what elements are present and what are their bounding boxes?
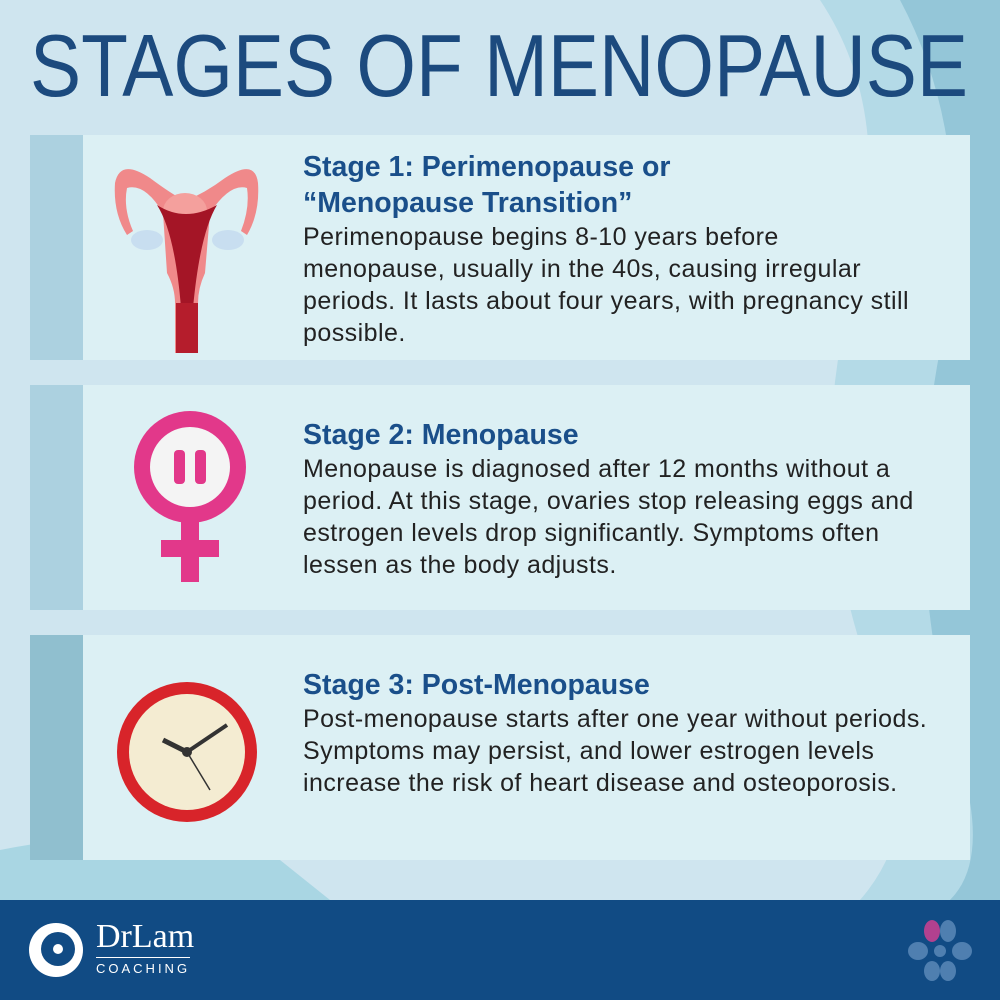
stage 2 text: Menopause is diagnosed after 12 months without a: [303, 455, 890, 483]
panel: stage 3: [30, 635, 970, 860]
stage 2 text: period. At this stage, ovaries stop releasing eggs and: [303, 487, 914, 515]
icon: flower logo: [908, 920, 972, 981]
logo: DrLam Coaching: DrLam: [96, 918, 194, 955]
stage 1 text: menopause, usually in the 40s, causing irregular: [303, 255, 861, 283]
stage 1 text: periods. It lasts about four years, with pregnancy still: [303, 287, 909, 315]
stage 2 text: Stage 2: Menopause: [303, 419, 579, 451]
stage 1 text: possible.: [303, 319, 406, 347]
icon: clock: [117, 682, 257, 822]
footer: [0, 900, 1000, 1000]
stage 3 text: Symptoms may persist, and lower estrogen levels: [303, 737, 874, 765]
stage 3 text: Post-menopause starts after one year without periods.: [303, 705, 927, 733]
stage 1 text: “Menopause Transition”: [303, 187, 632, 219]
logo: DrLam Coaching: [29, 918, 194, 977]
panel: stage 1: [30, 135, 970, 360]
stage 1 text: Stage 1: Perimenopause or: [303, 151, 670, 183]
icon: female symbol with pause: [134, 411, 246, 582]
stage 2 text: estrogen levels drop significantly. Symptoms often: [303, 519, 879, 547]
logo: DrLam Coaching: COACHING: [96, 961, 190, 976]
stage 1 text: [303, 151, 909, 347]
stage 3 text: [303, 669, 927, 797]
stage 2 text: lessen as the body adjusts.: [303, 551, 617, 579]
stage 1 text: Perimenopause begins 8-10 years before: [303, 223, 779, 251]
stage 2 text: [303, 419, 914, 579]
stage 3 text: increase the risk of heart disease and osteoporosis.: [303, 769, 898, 797]
panel: stage 2: [30, 385, 970, 610]
icon: uterus: [114, 169, 258, 353]
stage 3 text: Stage 3: Post-Menopause: [303, 669, 650, 701]
